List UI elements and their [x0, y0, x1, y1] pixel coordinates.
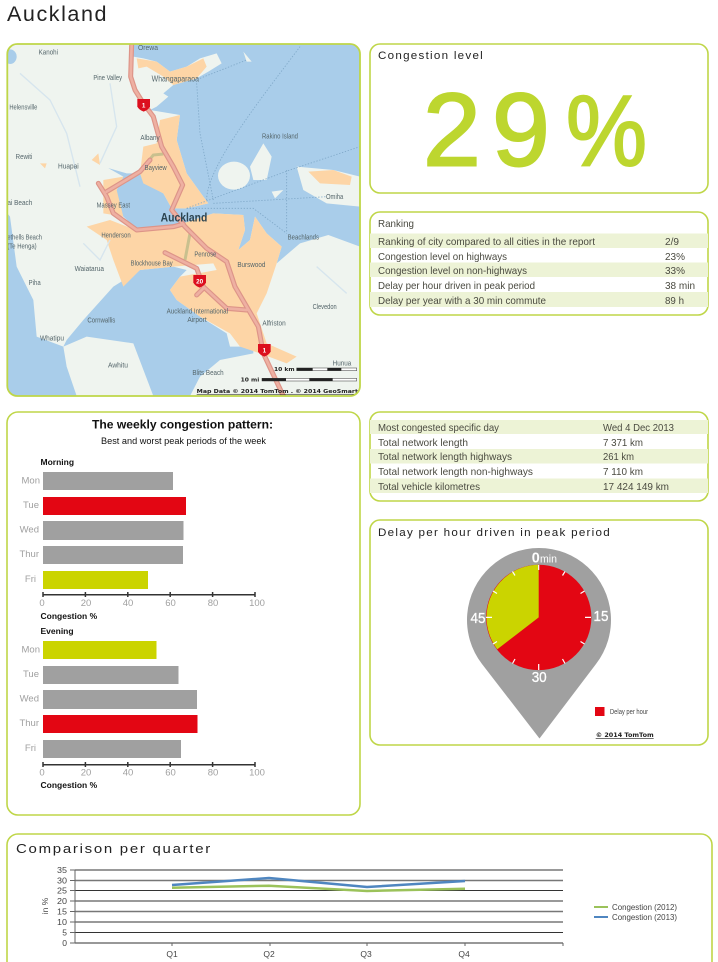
panel: map of Auckland: Albany: [140, 135, 160, 142]
panel: network statistics table: [370, 412, 708, 501]
bar chart: evening: Tue: [23, 669, 39, 680]
statistics rows: 7 110 km: [603, 466, 643, 478]
copyright: © 2014 TomTom: [596, 731, 654, 739]
bar chart: morning: Tue: [23, 500, 39, 511]
ranking rows: Delay per year with a 30 min commute: [378, 295, 546, 307]
panel: map of Auckland: Whangaparaoa: [152, 75, 199, 84]
line chart: Q1: [166, 949, 178, 959]
statistics rows: Total vehicle kilometres: [378, 481, 480, 493]
bar chart: morning: 40: [123, 598, 133, 609]
panel: map of Auckland: Burswood: [237, 262, 265, 269]
line chart: 30: [57, 876, 67, 886]
panel: map of Auckland: Huapai: [58, 164, 79, 171]
heading: congestion level: Congestion level: [378, 50, 484, 62]
bar chart: evening: Fri: [25, 743, 36, 754]
panel: comparison per quarter: [7, 834, 712, 962]
heading: comparison per quarter: Comparison per quarter: [16, 841, 212, 856]
title: Auckland: [7, 3, 108, 26]
line chart: 20: [57, 896, 67, 906]
panel: map of Auckland: Cornwallis: [87, 317, 116, 324]
icon: clock pin gauge: 0: [532, 550, 540, 567]
statistics rows: Total network length: [378, 437, 468, 449]
bar chart: evening: [19, 626, 265, 790]
panel: map of Auckland: Airport: [187, 317, 207, 324]
statistics rows: Total network length non-highways: [378, 466, 533, 478]
line chart: 25: [57, 886, 67, 896]
statistics rows: Wed 4 Dec 2013: [603, 422, 674, 434]
ranking rows: [378, 236, 695, 307]
line chart: 10: [57, 917, 67, 927]
panel: map of Auckland: Orewa: [138, 45, 158, 52]
bar chart: evening: Wed: [20, 694, 39, 704]
statistics rows: Total network length highways: [378, 451, 512, 463]
bar chart: evening: 0: [39, 768, 45, 778]
panel: map of Auckland: Alfriston: [262, 320, 286, 327]
bar chart: evening: 100: [249, 768, 265, 778]
line chart: [40, 865, 563, 959]
bar chart: evening: 20: [81, 768, 91, 778]
legend: delay per hour: Delay per hour: [610, 709, 649, 716]
icon: clock pin gauge: [467, 548, 611, 738]
icon: clock pin gauge: min: [540, 554, 557, 566]
panel: map of Auckland: Penrose: [194, 252, 216, 259]
icon: clock pin gauge: 15: [594, 608, 608, 625]
bar chart: morning: Mon: [22, 476, 40, 486]
panel: map of Auckland: 1: [142, 102, 146, 109]
bar chart: evening: Thur: [19, 718, 39, 729]
line chart: 0: [62, 938, 67, 948]
panel: map of Auckland: Auckland International: [167, 308, 228, 315]
panel: map of Auckland: Waiatarua: [75, 266, 104, 273]
bar chart: evening: 60: [165, 768, 176, 778]
big number: 29%: [423, 72, 647, 188]
panel: map of Auckland: Clevedon: [313, 304, 337, 311]
panel: map of Auckland: Rakino Island: [262, 134, 298, 141]
chart subtitle: Best and worst peak periods of the week: [101, 436, 266, 447]
icon: clock pin gauge: 45: [470, 610, 486, 627]
big number: 29%: %: [566, 76, 647, 188]
bar chart: morning: Morning: [40, 457, 74, 467]
ranking rows: 2/9: [665, 236, 679, 248]
heading: delay per hour driven in peak period: Delay per hour driven in peak period: [378, 527, 611, 539]
panel: map of Auckland: Blits Beach: [192, 370, 224, 377]
panel: map of Auckland: Awhitu: [108, 363, 128, 370]
panel: map of Auckland: Massey East: [97, 203, 130, 210]
line chart: Q4: [458, 949, 470, 959]
bar chart: evening: 80: [208, 768, 218, 778]
bar chart: evening: Congestion %: [40, 780, 98, 790]
panel: map of Auckland: ai Beach: [7, 200, 32, 207]
line chart: 15: [57, 906, 67, 916]
statistics rows: 17 424 149 km: [603, 481, 669, 493]
bar chart: morning: Fri: [25, 574, 36, 585]
big number: 29%: 29: [423, 72, 550, 188]
legend: quarter chart: Congestion (2012): [612, 902, 677, 912]
bar chart: morning: Congestion %: [40, 611, 98, 621]
panel: map of Auckland: 1: [263, 347, 267, 354]
panel: map of Auckland: Beachlands: [288, 234, 319, 241]
panel: map of Auckland: 10 mi: [241, 378, 259, 384]
statistics rows: Most congested specific day: [378, 422, 500, 434]
ranking rows: 89 h: [665, 295, 684, 307]
bar chart: morning: 80: [208, 598, 218, 609]
ranking rows: Ranking of city compared to all cities in the report: [378, 236, 595, 248]
line chart: 35: [57, 865, 67, 875]
panel: map of Auckland: (Te Henga): [7, 244, 37, 251]
statistics rows: 7 371 km: [603, 437, 643, 449]
panel: map of Auckland: 20: [196, 279, 204, 286]
icon: clock pin gauge: 30: [532, 669, 547, 686]
panel: map of Auckland: ethells Beach: [7, 235, 42, 242]
panel: map of Auckland: Auckland: [161, 211, 207, 225]
panel: map of Auckland: 10 km: [274, 367, 295, 373]
bar chart: morning: 20: [81, 598, 91, 609]
ranking rows: Congestion level on highways: [378, 251, 507, 263]
line chart: Q2: [263, 949, 275, 959]
bar chart: morning: 60: [165, 598, 176, 609]
statistics rows: [378, 422, 674, 493]
panel: map of Auckland: Pine Valley: [93, 75, 122, 82]
ranking rows: Delay per hour driven in peak period: [378, 280, 535, 292]
ranking rows: 33%: [665, 265, 685, 277]
panel: map of Auckland: Piha: [29, 280, 41, 287]
line chart: Q3: [360, 949, 372, 959]
legend: quarter chart: Congestion (2013): [612, 912, 677, 922]
line chart: 5: [62, 928, 67, 938]
bar chart: evening: Mon: [22, 644, 40, 656]
panel: map of Auckland: Henderson: [101, 233, 131, 240]
panel: map of Auckland: Whatipu: [40, 335, 64, 342]
bar chart: evening: Evening: [40, 626, 74, 636]
panel: map of Auckland: [3, 44, 360, 396]
bar chart: morning: Wed: [20, 524, 39, 536]
legend: quarter chart: [594, 902, 677, 922]
panel: delay per hour: [370, 520, 708, 745]
panel: map of Auckland: Omiha: [326, 194, 343, 201]
panel: map of Auckland: Blockhouse Bay: [131, 261, 173, 268]
ranking rows: 38 min: [665, 280, 695, 292]
line chart: in %: [40, 897, 50, 914]
panel: map of Auckland: Map Data © 2014 TomTom . © 2014 GeoSmart: [197, 389, 358, 395]
panel: weekly congestion pattern: [7, 412, 360, 815]
legend: delay per hour: [595, 707, 649, 716]
panel: congestion level: [370, 44, 708, 193]
ranking rows: 23%: [665, 251, 685, 263]
statistics rows: 261 km: [603, 451, 634, 463]
bar chart: evening: 40: [123, 768, 133, 778]
panel: map of Auckland: Rewiti: [16, 154, 33, 161]
heading: ranking: Ranking: [378, 218, 414, 230]
panel: map of Auckland: Hunua: [333, 361, 351, 368]
ranking rows: Congestion level on non-highways: [378, 265, 527, 277]
panel: map of Auckland: Bayview: [145, 165, 167, 172]
chart title: The weekly congestion pattern:: [92, 418, 273, 432]
panel: map of Auckland: Helensville: [9, 104, 37, 111]
bar chart: morning: 0: [39, 598, 45, 609]
bar chart: morning: Thur: [19, 549, 39, 560]
bar chart: morning: 100: [249, 598, 265, 609]
panel: map of Auckland: Kanohi: [39, 49, 58, 56]
bar chart: morning: [19, 457, 265, 621]
panel: ranking table: [370, 212, 708, 315]
